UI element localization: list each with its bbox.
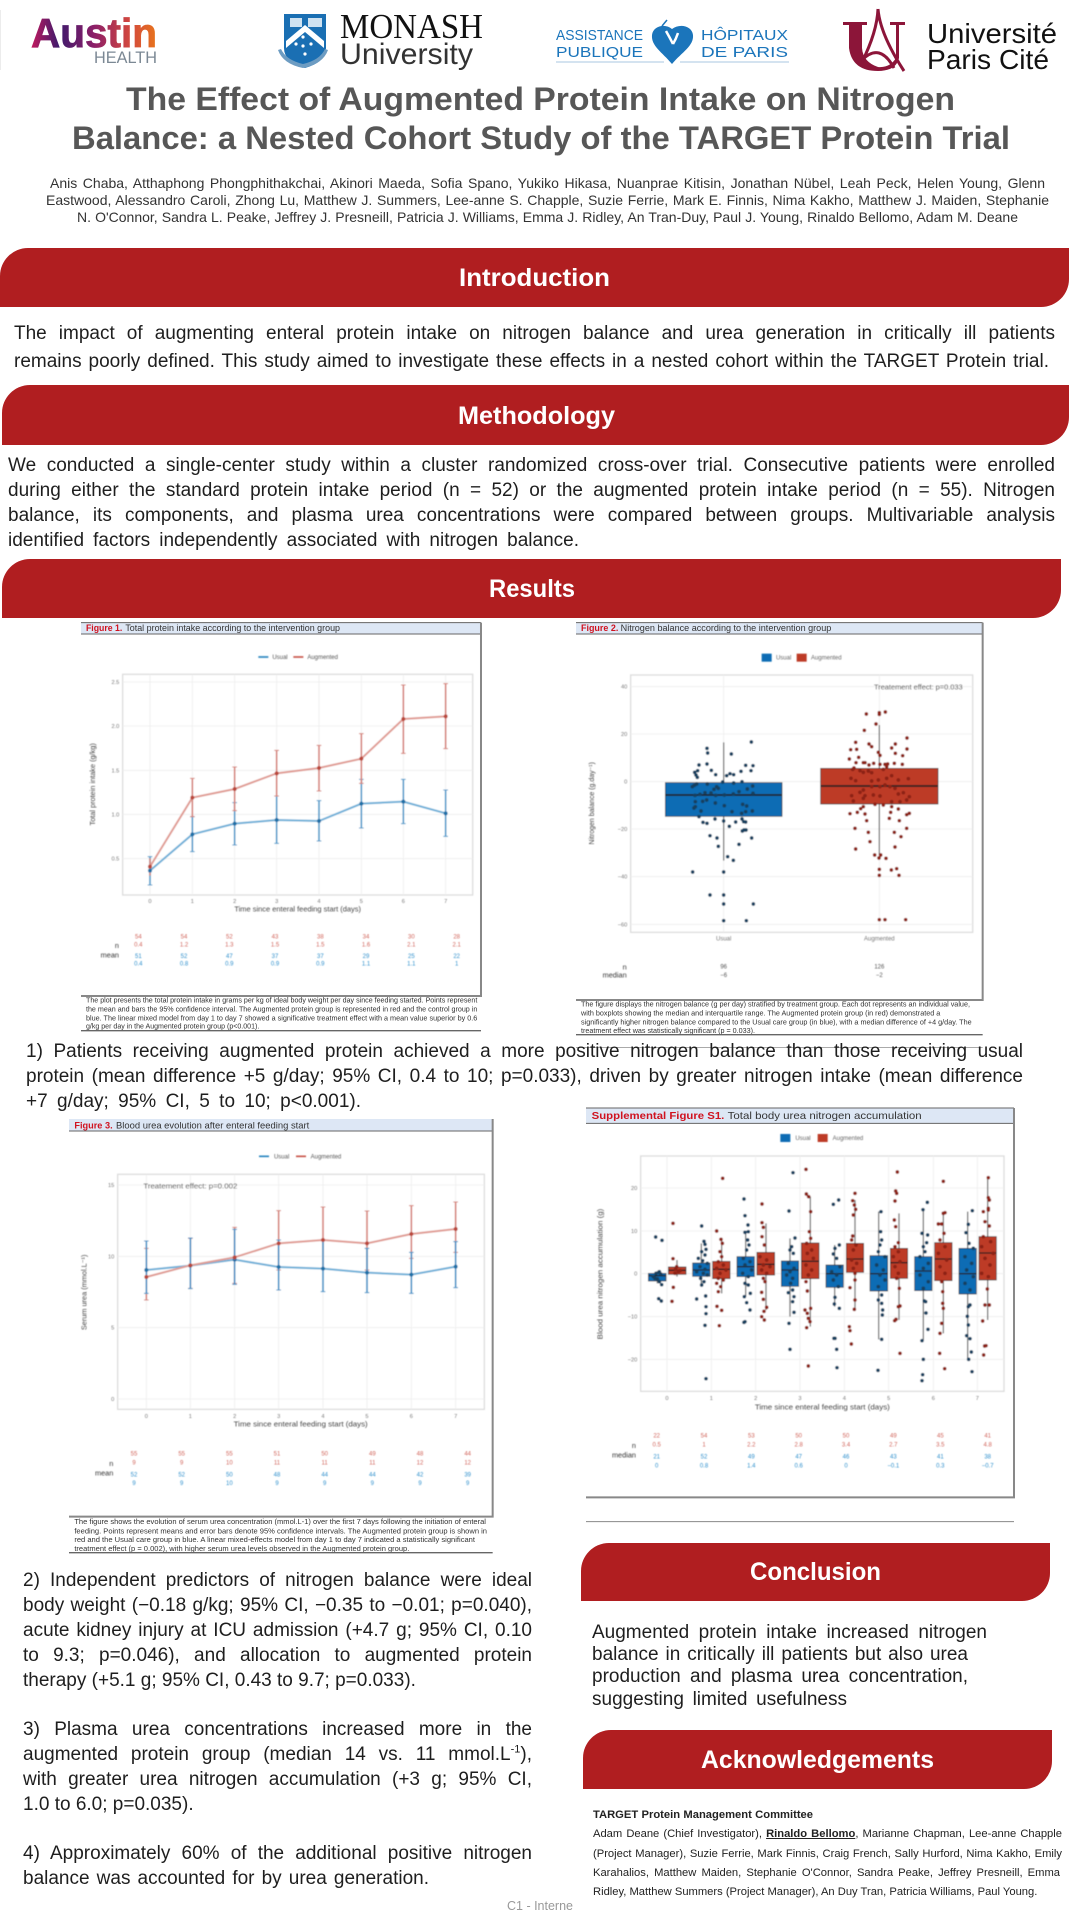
figure S1 data table: 53 <box>748 1434 755 1440</box>
figure 2 caption: significantly higher nitrogen balance compared to the Usual care group (in blue), with a median difference of +4 g/day. The <box>581 1019 972 1026</box>
figure 3 line chart: Augmented <box>311 1154 341 1160</box>
panel: figure 3 blood urea <box>69 1119 493 1553</box>
figure 1 data table: 1.3 <box>225 943 234 949</box>
figure 1 data table: mean <box>101 950 119 959</box>
figure 3 data table: 9 <box>180 1481 184 1487</box>
figure 3 line chart: 15 <box>108 1183 114 1189</box>
figure 1 line chart: 2.5 <box>111 680 119 686</box>
acknowledgements text <box>593 1809 1062 1898</box>
methodology text: balance, its components, and plasma urea concentrations were compared between groups. Multivariable analysis <box>8 505 1055 526</box>
result 3 text <box>23 1719 532 1815</box>
figure 1 data table: 54 <box>135 934 142 940</box>
figure 2 caption: treatment effect was statistically significant (p = 0.033). <box>581 1028 755 1035</box>
figure S1 data table: 45 <box>937 1434 944 1440</box>
figure S1 data table: 0.6 <box>795 1464 803 1470</box>
figure 1 data table: 25 <box>408 954 415 960</box>
figure 3 data table: n <box>109 1459 113 1468</box>
logo: Monash University <box>278 7 483 71</box>
figure 3 line chart: 3 <box>277 1414 280 1420</box>
result 2 text: acute kidney injury at ICU admission (+4.7 g; 95% CI, 0.10 <box>23 1620 532 1641</box>
figure 1 line chart: 2.0 <box>111 724 119 730</box>
figure 3 line chart: 5 <box>111 1326 114 1332</box>
figure S1 data table: −0.7 <box>982 1464 994 1470</box>
figure S1 boxplots: 3 <box>798 1396 802 1402</box>
figure 1 data table: 54 <box>181 934 188 940</box>
logo: Austin Health: Austin <box>31 10 157 56</box>
figure 3 data table: 42 <box>417 1472 424 1478</box>
figure 3 data table: 9 <box>371 1481 375 1487</box>
figure S1 boxplots: 20 <box>631 1186 637 1192</box>
figure 1 line chart: 5 <box>360 899 363 905</box>
figure 3 data table: 12 <box>464 1461 472 1467</box>
figure 1 data table: 1 <box>455 962 459 968</box>
figure 1 data table: 52 <box>181 954 188 960</box>
result 3 text: augmented protein group (median 14 vs. 11 mmol.L-1), <box>23 1744 532 1765</box>
figure 2 boxplot: Nitrogen balance (g.day⁻¹) <box>589 762 596 845</box>
figure 3 line chart: 1 <box>189 1414 192 1420</box>
figure S1 boxplots: −20 <box>628 1357 637 1363</box>
figure 1 header <box>81 623 481 634</box>
figure 3 line chart: Serum urea (mmol.L⁻¹) <box>79 1255 88 1330</box>
logo: Assistance Publique Hopitaux de Paris: PUBLIQUE <box>556 44 643 61</box>
logo: Universite Paris Cite <box>843 9 1057 75</box>
figure 1 data table: 1.5 <box>316 943 325 949</box>
figure 3 data table: 52 <box>178 1472 186 1478</box>
figure 1 data table: 37 <box>317 954 324 960</box>
panel: supplemental figure S1 <box>586 1108 1014 1522</box>
authors: Eastwood, Alessandro Caroli, Zhong Lu, Matthew J. Summers, Lee-anne S. Chapple, Suzie Ferrie, Mark E. Finnis, Nima Kakho, Matthew J. Maiden, Stephanie <box>46 192 1049 208</box>
figure 3 data table: 9 <box>132 1481 136 1487</box>
acknowledgements text: TARGET Protein Management Committee <box>593 1809 813 1821</box>
conclusion text <box>592 1622 987 1710</box>
figure 3 header <box>69 1119 493 1131</box>
figure 3 data table: 55 <box>131 1452 138 1458</box>
logo: Assistance Publique Hopitaux de Paris: ASSISTANCE <box>556 27 643 44</box>
figure 3 line chart: 5 <box>365 1414 369 1420</box>
figure 3 line chart: 0 <box>145 1414 148 1420</box>
section header: Acknowledgements: Acknowledgements <box>701 1746 934 1774</box>
figure 2 boxplot: Treatement effect: p=0.033 <box>874 682 963 691</box>
figure S1 data table: 49 <box>748 1455 755 1461</box>
figure 3 data table: 49 <box>369 1452 376 1458</box>
result 2 text: body weight (−0.18 g/kg; 95% CI, −0.35 to −0.01; p=0.040), <box>23 1595 532 1616</box>
authors: Anis Chaba, Atthaphong Phongphithakchai, Akinori Maeda, Sofia Spano, Yukiko Hikasa, Nuanprae Kitisin, Jonathan Nübel, Leah Peck, Helen Young, Glenn <box>50 175 1045 191</box>
figure S1 boxplots: −10 <box>628 1315 637 1321</box>
section header: Introduction <box>0 248 1069 307</box>
figure 1 line chart: 3 <box>275 899 278 905</box>
figure S1 data table: 50 <box>795 1434 803 1440</box>
figure S1 data table: 0.3 <box>936 1464 945 1470</box>
figure 1 data table: 28 <box>453 934 461 940</box>
figure 1 data table: 0.4 <box>134 962 143 968</box>
figure S1 boxplots: 0 <box>665 1396 669 1402</box>
figure 3 data table: 39 <box>464 1472 472 1478</box>
section header: Conclusion: Conclusion <box>750 1558 881 1586</box>
figure 1 data table: 1.1 <box>362 962 371 968</box>
figure 1 caption: g/kg per day in the Augmented protein group (p<0.001). <box>86 1024 259 1031</box>
logo: Monash University: University <box>340 38 473 71</box>
figure 2 boxplot: 40 <box>621 685 627 691</box>
figure 3 data table: 9 <box>180 1461 184 1467</box>
figure 1 data table: 47 <box>226 954 233 960</box>
figure 1 line chart: 0 <box>148 899 152 905</box>
figure 1 line chart: Total protein intake (g/kg) <box>88 743 97 825</box>
title: Balance: a Nested Cohort Study of the TARGET Protein Trial <box>72 120 1010 156</box>
figure 1 data table <box>101 934 461 968</box>
figure 3 line chart: Usual <box>274 1154 289 1160</box>
figure 1 data table: 43 <box>272 934 279 940</box>
figure 1 caption: The plot presents the total protein intake in grams per kg of ideal body weight per day since feeding started. Points represent <box>86 998 477 1005</box>
figure 3 line chart <box>79 1154 484 1429</box>
figure 2 boxplot: n <box>623 963 627 972</box>
figure S1 data table: 38 <box>984 1455 992 1461</box>
introduction text <box>14 323 1055 372</box>
logo: Austin Health: HEALTH <box>94 48 157 67</box>
authors <box>46 175 1049 225</box>
figure 1 header: Figure 1. <box>86 623 122 633</box>
figure S1 data table: 0 <box>844 1464 848 1470</box>
figure S1 header <box>586 1108 1014 1123</box>
figure 1 data table: 0.9 <box>316 962 325 968</box>
figure 3 line chart: 6 <box>410 1414 413 1420</box>
figure 2 boxplot <box>589 654 973 980</box>
figure S1 data table: 52 <box>701 1455 708 1461</box>
figure S1 data table: 47 <box>795 1455 803 1461</box>
figure S1 boxplots: 10 <box>631 1229 637 1235</box>
section header: Conclusion <box>581 1543 1050 1601</box>
conclusion text: balance in critically ill patients but also urea <box>592 1644 968 1665</box>
figure 1 data table: n <box>115 941 119 950</box>
figure 2 header <box>576 623 983 634</box>
conclusion text: production and plasma urea concentration, <box>592 1666 968 1687</box>
section header: Methodology: Methodology <box>458 402 615 430</box>
result 1 text <box>26 1041 1023 1112</box>
figure S1 data table: 2.2 <box>747 1442 756 1448</box>
figure 1 data table: 1.2 <box>180 943 189 949</box>
figure 1 line chart: 0.5 <box>111 857 119 863</box>
figure 1 data table: 51 <box>135 954 142 960</box>
figure 1 data table: 1.1 <box>407 962 416 968</box>
figure S1 boxplots: Usual <box>795 1136 811 1142</box>
figure 3 caption: The figure shows the evolution of serum urea concentration (mmol.L-1) over the first 7 days following the initiation of enteral <box>74 1519 486 1526</box>
figure 3 data table: 11 <box>322 1461 328 1467</box>
figure S1 boxplots: 4 <box>843 1396 846 1402</box>
figure 1 data table: 2.1 <box>452 943 461 949</box>
figure 3 data table: 51 <box>274 1452 281 1458</box>
figure 2 boxplot: −40 <box>618 875 627 881</box>
figure 3 data table: 9 <box>132 1461 136 1467</box>
section header: Results: Results <box>489 575 575 603</box>
figure 3 data table: 9 <box>323 1481 327 1487</box>
methodology text: during either the standard protein intake period (n = 52) or the augmented protein intake period (n = 55). Nitrogen <box>8 480 1055 501</box>
figure 1 data table: 37 <box>272 954 279 960</box>
figure 3 caption <box>74 1519 487 1553</box>
figure 3 data table <box>95 1452 472 1487</box>
figure 1 data table: 38 <box>317 934 324 940</box>
methodology text: We conducted a single-center study within a cluster randomized cross-over trial. Consecutive patients were enrolled <box>8 455 1055 476</box>
title: The Effect of Augmented Protein Intake on Nitrogen <box>126 81 955 117</box>
result 2 text: to 9.3; p=0.046), and allocation to augmented protein <box>23 1645 532 1666</box>
figure 3 data table: 50 <box>321 1452 329 1458</box>
figure 1 header: Total protein intake according to the intervention group <box>125 623 340 633</box>
logo: Monash University: MONASH <box>340 7 483 46</box>
figure 3 data table: 50 <box>226 1472 233 1478</box>
result 4 text <box>23 1843 532 1889</box>
figure 3 data table: 44 <box>321 1472 329 1478</box>
figure S1 boxplots: 5 <box>887 1396 890 1402</box>
section header: Acknowledgements <box>583 1730 1052 1789</box>
figure 1 line chart: 6 <box>402 899 405 905</box>
methodology text: identified factors independently associated with nitrogen balance. <box>8 530 579 551</box>
figure S1 data table: 41 <box>984 1434 992 1440</box>
figure S1 data table: 50 <box>843 1434 850 1440</box>
figure 3 line chart: 2 <box>233 1414 236 1420</box>
figure S1 data table: 2.7 <box>889 1442 898 1448</box>
figure 2 header: Nitrogen balance according to the intervention group <box>621 623 831 633</box>
figure 3 data table: 11 <box>369 1461 376 1467</box>
figure S1 data table: 41 <box>937 1455 944 1461</box>
figure 2 boxplot: −6 <box>720 973 728 979</box>
figure 1 line chart: Time since enteral feeding start (days) <box>234 904 361 913</box>
figure 1 data table: 0.9 <box>225 962 234 968</box>
figure S1 header: Supplemental Figure S1. <box>592 1111 724 1122</box>
figure 3 header: Blood urea evolution after enteral feeding start <box>116 1121 310 1131</box>
acknowledgements text: Karahalios, Matthew Maiden, Stephanie O'Connor, Sandra Peake, Jeffrey Presneill, Emma <box>593 1867 1060 1879</box>
figure 3 line chart: 0 <box>111 1397 114 1403</box>
figure 3 data table: 9 <box>466 1481 470 1487</box>
figure S1 data table: 4.8 <box>983 1442 992 1448</box>
figure S1 data table: 1 <box>702 1442 706 1448</box>
figure S1 data table: 43 <box>890 1455 897 1461</box>
figure 1 data table: 22 <box>453 954 461 960</box>
figure S1 data table: 22 <box>653 1434 661 1440</box>
figure 3 data table: 10 <box>226 1461 233 1467</box>
result 2 text: 2) Independent predictors of nitrogen balance were ideal <box>23 1570 532 1591</box>
figure 2 boxplot: −60 <box>618 922 627 928</box>
introduction text: remains poorly defined. This study aimed to investigate these effects in a nested cohort within the TARGET Protein trial. <box>14 351 1049 372</box>
result 3 text: 1.0 to 6.0; p=0.035). <box>23 1794 194 1815</box>
figure 3 data table: 52 <box>131 1472 138 1478</box>
figure 3 data table: mean <box>95 1469 113 1478</box>
figure 3 data table: 44 <box>369 1472 376 1478</box>
logo: Austin Health <box>0 10 157 70</box>
figure 1 data table: 52 <box>226 934 233 940</box>
figure 3 data table: 10 <box>226 1481 233 1487</box>
figure 1 caption <box>86 998 477 1031</box>
result 1 text: protein (mean difference +5 g/day; 95% CI, 0.4 to 10; p=0.033), driven by greater nitrogen intake (mean difference <box>26 1066 1023 1087</box>
result 3 text: with greater urea nitrogen accumulation (+3 g; 95% CI, <box>23 1769 532 1790</box>
footer label: C1 - Interne <box>507 1899 573 1913</box>
figure 2 boxplot: Augmented <box>811 656 842 662</box>
figure 1 line chart: 1.5 <box>111 768 119 774</box>
result 4 text: 4) Approximately 60% of the additional positive nitrogen <box>23 1843 532 1864</box>
figure 2 boxplot: Usual <box>776 656 791 662</box>
figure 3 data table: 55 <box>178 1452 186 1458</box>
result 1 text: +7 g/day; 95% CI, 5 to 10; p<0.001). <box>26 1091 361 1112</box>
figure 2 boxplot: 20 <box>621 732 627 738</box>
figure 3 data table: 44 <box>464 1452 472 1458</box>
figure 1 data table: 30 <box>408 934 415 940</box>
figure 1 caption: the mean and bars the 95% confidence interval. The Augmented protein group is represented in red and the control group in <box>86 1007 477 1014</box>
figure 3 line chart: Treatement effect: p=0.002 <box>143 1181 237 1190</box>
figure 1 data table: 2.1 <box>407 943 416 949</box>
figure S1 boxplots: 6 <box>932 1396 935 1402</box>
figure S1 data table: 0.8 <box>700 1464 709 1470</box>
figure S1 data table: −0.1 <box>887 1464 900 1470</box>
acknowledgements text: Ridley, Matthew Summers (Project Manager), An Duy Tran, Patricia Williams, Paul Young. <box>593 1886 1037 1898</box>
figure S1 data table: 0.5 <box>653 1442 661 1448</box>
figure 1 caption: blue. The linear mixed model from day 1 to day 7 showed a significative treatment effect with a mean value superior by 0.6 <box>86 1015 477 1022</box>
figure S1 boxplots: 1 <box>710 1396 713 1402</box>
result 1 text: 1) Patients receiving augmented protein achieved a more positive nitrogen balance than those receiving usual <box>26 1041 1023 1062</box>
figure S1 data table: 0 <box>655 1464 659 1470</box>
figure S1 data table: 2.8 <box>795 1442 803 1448</box>
figure S1 boxplots: Time since enteral feeding start (days) <box>755 1402 890 1411</box>
figure 3 caption: treatment effect (p = 0.002), with higher serum urea levels observed in the Augmented protein group. <box>74 1546 409 1553</box>
figure S1 data table <box>612 1434 994 1470</box>
figure 1 line chart: 4 <box>317 899 321 905</box>
figure S1 data table: n <box>632 1441 636 1450</box>
figure 3 data table: 55 <box>226 1452 233 1458</box>
panel: figure 2 nitrogen balance <box>576 623 983 1047</box>
result 3 text: 3) Plasma urea concentrations increased more in the <box>23 1719 532 1740</box>
panel: figure 1 protein intake <box>81 623 481 1031</box>
result 2 text <box>23 1570 532 1691</box>
section header: Methodology <box>2 385 1069 445</box>
figure 1 data table: 29 <box>363 954 370 960</box>
figure 2 caption <box>580 1002 972 1035</box>
result 4 text: balance was accounted for by urea generation. <box>23 1868 429 1889</box>
figure 1 line chart: 1 <box>191 899 194 905</box>
figure 3 line chart: 7 <box>454 1414 457 1420</box>
figure 1 line chart: 2 <box>233 899 236 905</box>
figure 3 line chart: 4 <box>321 1414 325 1420</box>
figure 3 header: Figure 3. <box>74 1121 113 1131</box>
logo: Universite Paris Cite: Paris Cité <box>927 44 1049 75</box>
figure 2 caption: The figure displays the nitrogen balance (g per day) stratified by treatment group. Each dot represents an individual value, <box>581 1002 970 1009</box>
figure 3 data table: 11 <box>274 1461 281 1467</box>
section header: Introduction: Introduction <box>459 264 610 292</box>
figure 1 data table: 0.8 <box>180 962 189 968</box>
figure 2 boxplot: 126 <box>874 965 885 971</box>
figure S1 boxplots: 0 <box>634 1272 637 1278</box>
figure 1 line chart: 7 <box>444 899 447 905</box>
figure S1 data table: 21 <box>653 1455 661 1461</box>
figure 3 caption: feeding. Points represent means and error bars denote 95% confidence intervals. The Augmented protein group is shown in <box>74 1528 487 1535</box>
section header: Results <box>2 559 1061 618</box>
logo: Assistance Publique Hopitaux de Paris: DE PARIS <box>701 44 788 61</box>
figure 1 data table: 0.9 <box>271 962 280 968</box>
logo: Universite Paris Cite: Université <box>927 18 1057 49</box>
figure 1 line chart <box>88 655 473 913</box>
figure 3 data table: 48 <box>274 1472 281 1478</box>
figure S1 boxplots: Blood urea nitrogen accumulation (g) <box>595 1209 604 1339</box>
figure S1 data table: median <box>612 1450 636 1459</box>
figure S1 data table: 1.4 <box>747 1464 756 1470</box>
figure S1 boxplots <box>595 1134 1004 1411</box>
figure 2 header: Figure 2. <box>581 623 618 633</box>
figure 2 boxplot: −20 <box>618 827 627 833</box>
figure 2 boxplot: 0 <box>624 780 627 786</box>
result 2 text: therapy (+5.1 g; 95% CI, 0.43 to 9.7; p=0.033). <box>23 1670 416 1691</box>
logo: Assistance Publique Hopitaux de Paris <box>556 20 789 64</box>
figure 3 data table: 9 <box>418 1481 422 1487</box>
figure S1 boxplots: 2 <box>754 1396 757 1402</box>
figure S1 data table: 46 <box>843 1455 850 1461</box>
figure 2 boxplot: Usual <box>716 937 731 943</box>
figure 2 boxplot: 96 <box>720 965 728 971</box>
figure 1 line chart: Augmented <box>307 655 338 661</box>
figure 1 data table: 0.4 <box>134 943 143 949</box>
introduction text: The impact of augmenting enteral protein intake on nitrogen balance and urea generation in critically ill patients <box>14 323 1055 344</box>
figure S1 data table: 3.5 <box>936 1442 945 1448</box>
figure 1 data table: 1.5 <box>271 943 280 949</box>
acknowledgements text: (Project Manager), Suzie Ferrie, Mark Finnis, Craig French, Sally Hurford, Nima Kakho, Emily <box>593 1848 1062 1860</box>
conclusion text: Augmented protein intake increased nitrogen <box>592 1622 987 1643</box>
figure S1 boxplots: Augmented <box>833 1136 863 1142</box>
figure 2 caption: with boxplots showing the median and interquartile range. The Augmented protein group (in red) demonstrated a <box>580 1011 940 1018</box>
title <box>72 81 1010 156</box>
figure 3 line chart: Time since enteral feeding start (days) <box>234 1420 368 1429</box>
figure 1 data table: 1.6 <box>362 943 371 949</box>
figure 1 line chart: 1.0 <box>111 812 119 818</box>
figure S1 data table: 3.4 <box>842 1442 851 1448</box>
figure 3 data table: 12 <box>417 1461 424 1467</box>
authors: N. O'Connor, Sandra L. Peake, Jeffrey J. Presneill, Patricia J. Williams, Emma J. Ridley, An Tran-Duy, Paul J. Young, Rinaldo Bellomo, Adam M. Deane <box>77 209 1018 225</box>
figure 1 line chart: Usual <box>272 655 288 661</box>
figure S1 data table: 54 <box>701 1434 708 1440</box>
figure 2 boxplot: −2 <box>876 973 883 979</box>
figure S1 boxplots: 7 <box>976 1396 979 1402</box>
figure 3 line chart: 10 <box>108 1254 114 1260</box>
acknowledgements text: Adam Deane (Chief Investigator), Rinaldo Bellomo, Marianne Chapman, Lee-anne Chapple <box>593 1828 1062 1840</box>
figure S1 header: Total body urea nitrogen accumulation <box>728 1111 922 1122</box>
figure 2 boxplot: Augmented <box>864 937 895 943</box>
logo: Assistance Publique Hopitaux de Paris: HÔPITAUX <box>701 27 788 44</box>
figure 3 data table: 48 <box>417 1452 424 1458</box>
figure S1 data table: 49 <box>890 1434 897 1440</box>
figure 2 boxplot: median <box>603 971 627 980</box>
figure 3 data table: 9 <box>275 1481 279 1487</box>
figure 3 caption: red and the Usual care group in blue. A linear mixed-effects model from day 1 to day 7 indicated a statistically significant <box>74 1537 475 1544</box>
methodology text <box>8 455 1055 551</box>
figure 1 data table: 34 <box>363 934 370 940</box>
conclusion text: suggesting limited usefulness <box>592 1689 847 1710</box>
